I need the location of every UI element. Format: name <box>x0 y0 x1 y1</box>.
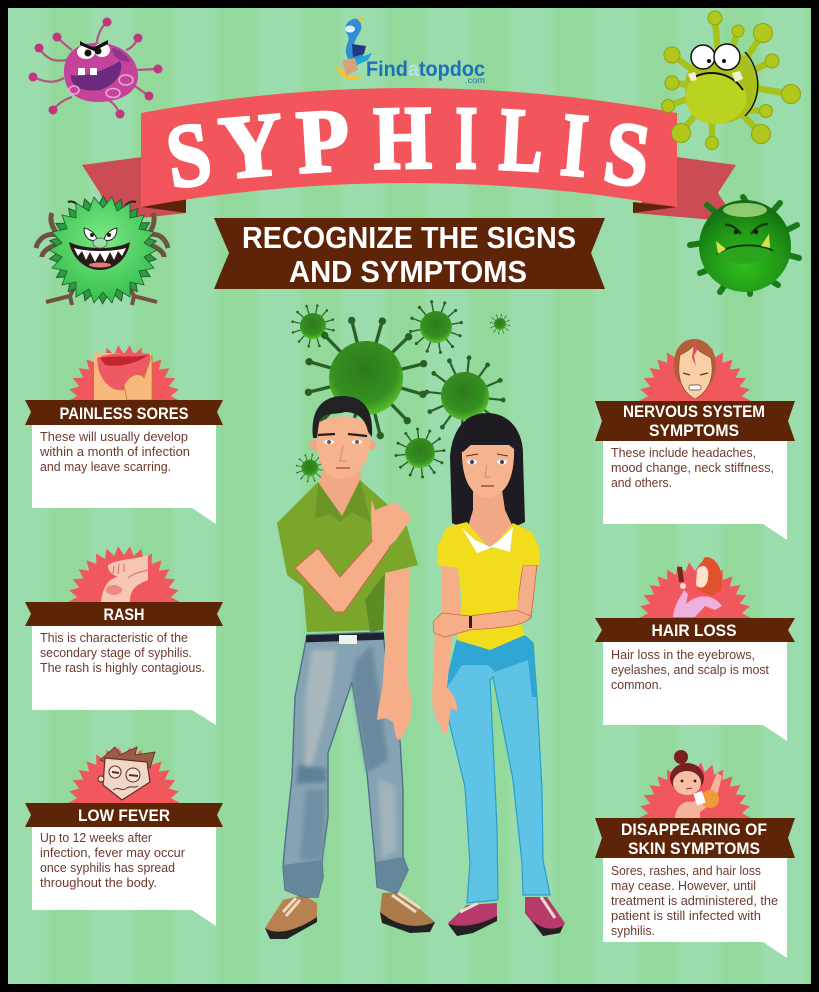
title: SYPHILIS <box>161 87 656 208</box>
icon: duck mascot <box>335 18 372 80</box>
panel: hair loss <box>595 557 795 741</box>
body text: may cease. However, until <box>611 879 756 893</box>
illustration: man <box>265 396 435 939</box>
title: SYPHILIS: S <box>598 102 656 207</box>
title: SYPHILIS: H <box>373 87 432 188</box>
subtitle text: AND SYMPTOMS <box>289 254 527 289</box>
icon: headache face <box>674 339 716 399</box>
woman neck <box>467 490 513 548</box>
panel: rash <box>25 546 223 725</box>
callout box <box>32 425 216 524</box>
man neck <box>318 470 362 525</box>
virus: furry green monster <box>36 188 168 312</box>
panel: nervous system symptoms <box>595 339 795 540</box>
body text: The rash is highly contagious. <box>40 661 205 675</box>
woman hair back <box>450 413 525 537</box>
ribbon: heading <box>25 803 223 827</box>
subtitle ribbon <box>214 218 605 289</box>
illustration: woman <box>432 413 565 936</box>
background viruses <box>287 292 512 487</box>
title: SYPHILIS: I <box>455 89 478 188</box>
icon: sores on lip <box>94 353 152 401</box>
body text: mood change, neck stiffness, <box>611 461 774 475</box>
icon: woman with hairbrush <box>673 557 722 617</box>
callout box <box>32 626 216 725</box>
body text: treatment is administered, the <box>611 894 778 908</box>
body text: This is characteristic of the <box>40 631 188 645</box>
body text: infection, fever may occur <box>40 846 185 860</box>
monster legs <box>46 280 157 305</box>
woman crossed forearm <box>433 610 531 637</box>
logo: Findatopdoc <box>335 18 485 85</box>
logo .com: .com <box>465 75 485 85</box>
body text: and may leave scarring. <box>40 460 171 474</box>
woman right upper arm <box>516 565 537 618</box>
callout box <box>603 858 787 958</box>
body text: Hair loss in the eyebrows, <box>611 648 755 662</box>
man hand <box>371 500 412 548</box>
monster arms <box>36 213 168 257</box>
title: SYPHILIS: Y <box>215 95 287 199</box>
woman left arm <box>432 565 461 733</box>
panel: low fever <box>25 747 223 926</box>
logo wordmark: Findatopdoc <box>366 58 485 81</box>
body text: These will usually develop <box>40 430 188 444</box>
title: SYPHILIS: I <box>557 95 592 197</box>
man crossed arm <box>295 540 390 612</box>
title banner <box>141 87 677 208</box>
ribbon: heading: LOW FEVER <box>78 806 170 825</box>
callout box <box>603 642 787 741</box>
ribbon: heading: HAIR LOSS <box>652 621 736 640</box>
virus: dark green monster <box>690 197 799 294</box>
body text: These include headaches, <box>611 446 756 460</box>
body text: and others. <box>611 476 672 490</box>
panel: disappearing of skin symptoms <box>595 750 795 958</box>
ribbon: heading: SKIN SYMPTOMS <box>628 839 760 858</box>
title: SYPHILIS: L <box>497 89 546 191</box>
monster antennae <box>68 201 136 212</box>
man jeans <box>283 632 408 897</box>
ribbon: heading <box>25 602 223 626</box>
icon: feverish face <box>98 747 155 800</box>
body text: syphilis. <box>611 924 655 938</box>
woman head <box>458 418 518 498</box>
man head <box>309 396 376 479</box>
body text: throughout the body. <box>40 876 157 890</box>
ribbon: heading <box>595 818 795 858</box>
banner tail: right <box>633 157 737 222</box>
body text: within a month of infection <box>39 445 190 459</box>
ribbon: heading: NERVOUS SYSTEM <box>623 402 765 421</box>
panel: painless sores <box>25 345 223 524</box>
body text: secondary stage of syphilis. <box>40 646 192 660</box>
subtitle text: RECOGNIZE THE SIGNS <box>242 220 576 255</box>
ribbon: heading: DISAPPEARING OF <box>621 820 767 839</box>
virus: purple monster <box>28 18 162 118</box>
man shoes <box>265 892 435 939</box>
virus: yellow-green monster <box>662 11 800 150</box>
ribbon: heading <box>595 618 795 642</box>
ribbon: heading: SYMPTOMS <box>649 421 739 440</box>
ribbon: heading: PAINLESS SORES <box>60 404 188 423</box>
body text: Up to 12 weeks after <box>40 831 152 845</box>
woman shirt <box>437 522 540 650</box>
callout box <box>32 827 216 926</box>
ribbon: heading <box>595 401 795 441</box>
callout box <box>603 441 787 540</box>
woman shoes <box>448 897 565 936</box>
banner tail: left <box>82 157 186 221</box>
body text: Sores, rashes, and hair loss <box>611 864 761 878</box>
ribbon: heading: RASH <box>104 605 144 624</box>
woman jeans <box>447 636 550 903</box>
woman wristwatch <box>469 616 472 628</box>
man hanging arm <box>377 567 412 740</box>
icon: scratching arm <box>101 555 148 602</box>
title: SYPHILIS: P <box>294 90 352 192</box>
body text: once syphilis has spread <box>40 861 175 875</box>
man belt <box>306 633 384 644</box>
icon: woman with skin patch <box>670 750 722 818</box>
ribbon: heading <box>25 400 223 425</box>
body text: common. <box>611 678 662 692</box>
body text: patient is still infected with <box>611 909 761 923</box>
body text: eyelashes, and scalp is most <box>611 663 770 677</box>
title: SYPHILIS: S <box>161 103 217 208</box>
man shirt <box>277 480 418 632</box>
